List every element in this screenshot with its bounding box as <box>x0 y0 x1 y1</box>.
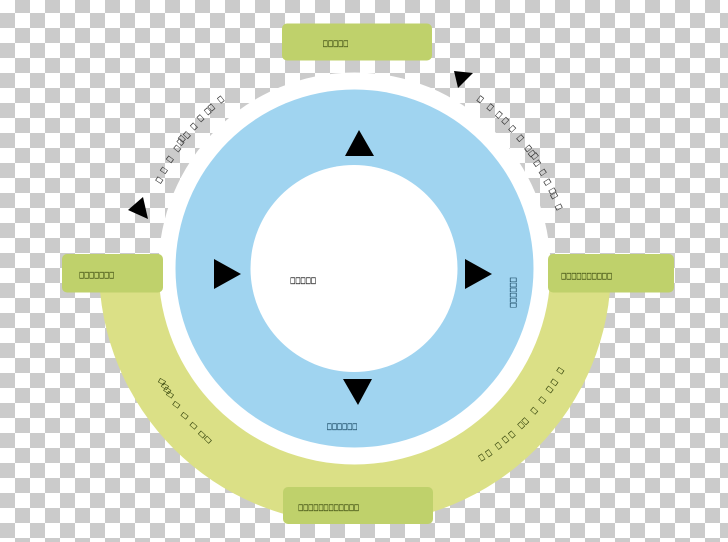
centre label: □□□□□ <box>290 276 316 286</box>
white outer ring <box>158 72 550 464</box>
lower right curved text: □ <box>483 447 494 459</box>
upper left curved text: □ <box>174 136 186 147</box>
upper right curved text: □ <box>549 190 561 200</box>
bottom green box: □□□□□□□□□□□□ <box>298 503 359 513</box>
upper right curved text <box>475 93 565 212</box>
left green box: □□□□□□□ <box>79 270 114 280</box>
arrow: bottom triangle <box>343 379 372 405</box>
lower right curved text: □ <box>515 419 526 430</box>
lower left curved text: □ <box>178 410 190 421</box>
lower left curved text: □ <box>202 434 213 445</box>
blue ring bottom label: □□□□□□ <box>327 422 357 432</box>
upper left curved text: □ <box>171 143 182 153</box>
upper right curved text: □ <box>542 177 554 187</box>
upper left curved text: □ <box>202 105 213 116</box>
lower right curved text: □ <box>528 405 539 416</box>
upper left curved text: □ <box>163 154 175 164</box>
lower left curved text: □ <box>170 399 182 410</box>
lower left curved text: □ <box>163 389 175 400</box>
upper right curved text: □ <box>515 132 526 143</box>
lower right curved text: □ <box>506 428 517 440</box>
top green box: □□□□□ <box>323 39 348 49</box>
upper right curved text: □ <box>553 202 565 212</box>
lower right curved text: □ <box>519 415 530 426</box>
lower right curved text <box>476 365 566 463</box>
lower left curved text: □ <box>187 420 199 431</box>
upper left curved text: □ <box>176 133 187 144</box>
upper right curved text: □ <box>523 143 534 153</box>
lower right curved text: □ <box>500 433 510 445</box>
upper right curved text: □ <box>507 123 518 134</box>
upper right curved text: □ <box>494 109 505 120</box>
upper left curved text: □ <box>157 165 169 175</box>
lower right curved text: □ <box>476 451 486 463</box>
upper left curved text: □ <box>153 175 165 185</box>
lower left curved text: □ <box>155 376 167 386</box>
lower left curved text: □ <box>158 381 170 391</box>
white centre circle <box>250 165 458 372</box>
lower right curved text: □ <box>493 439 503 451</box>
upper right curved text: □ <box>485 101 496 112</box>
upper right curved text: □ <box>500 115 511 126</box>
arrow: upper right corner triangle <box>454 71 473 88</box>
upper right curved text: □ <box>537 167 549 177</box>
upper left curved text: □ <box>194 112 206 123</box>
upper right curved text: □ <box>547 186 559 196</box>
lower right curved text: □ <box>554 365 566 376</box>
lower left curved text: □ <box>196 428 207 440</box>
lower right curved text: □ <box>548 377 560 387</box>
lower left curved text <box>155 376 213 445</box>
upper left curved text: □ <box>215 93 226 105</box>
upper right curved text: □ <box>532 157 544 168</box>
arrow: top triangle <box>345 130 374 156</box>
upper left curved text <box>153 93 226 185</box>
left green box <box>62 254 163 292</box>
upper right curved text: □ <box>529 150 541 161</box>
bottom green box <box>283 487 433 524</box>
right green box <box>548 254 674 292</box>
top green box <box>282 24 432 60</box>
upper right curved text: □ <box>526 148 538 158</box>
lower left curved text: □ <box>161 385 173 395</box>
lower right curved text: □ <box>536 394 547 405</box>
lower right curved text: □ <box>543 384 555 394</box>
upper left curved text: □ <box>206 101 216 113</box>
arrow: upper left corner triangle <box>128 197 148 219</box>
upper left curved text: □ <box>181 129 192 140</box>
blue ring right vertical label: □□□□□□ <box>508 277 518 308</box>
arrow: left triangle <box>214 259 241 289</box>
upper left curved text: □ <box>188 120 199 132</box>
right green box: □□□□□□□□□□ <box>561 272 612 282</box>
upper right curved text: □ <box>475 93 486 105</box>
lower green arc band <box>100 290 610 514</box>
blue ring <box>176 90 534 448</box>
arrow: right triangle <box>465 259 492 289</box>
